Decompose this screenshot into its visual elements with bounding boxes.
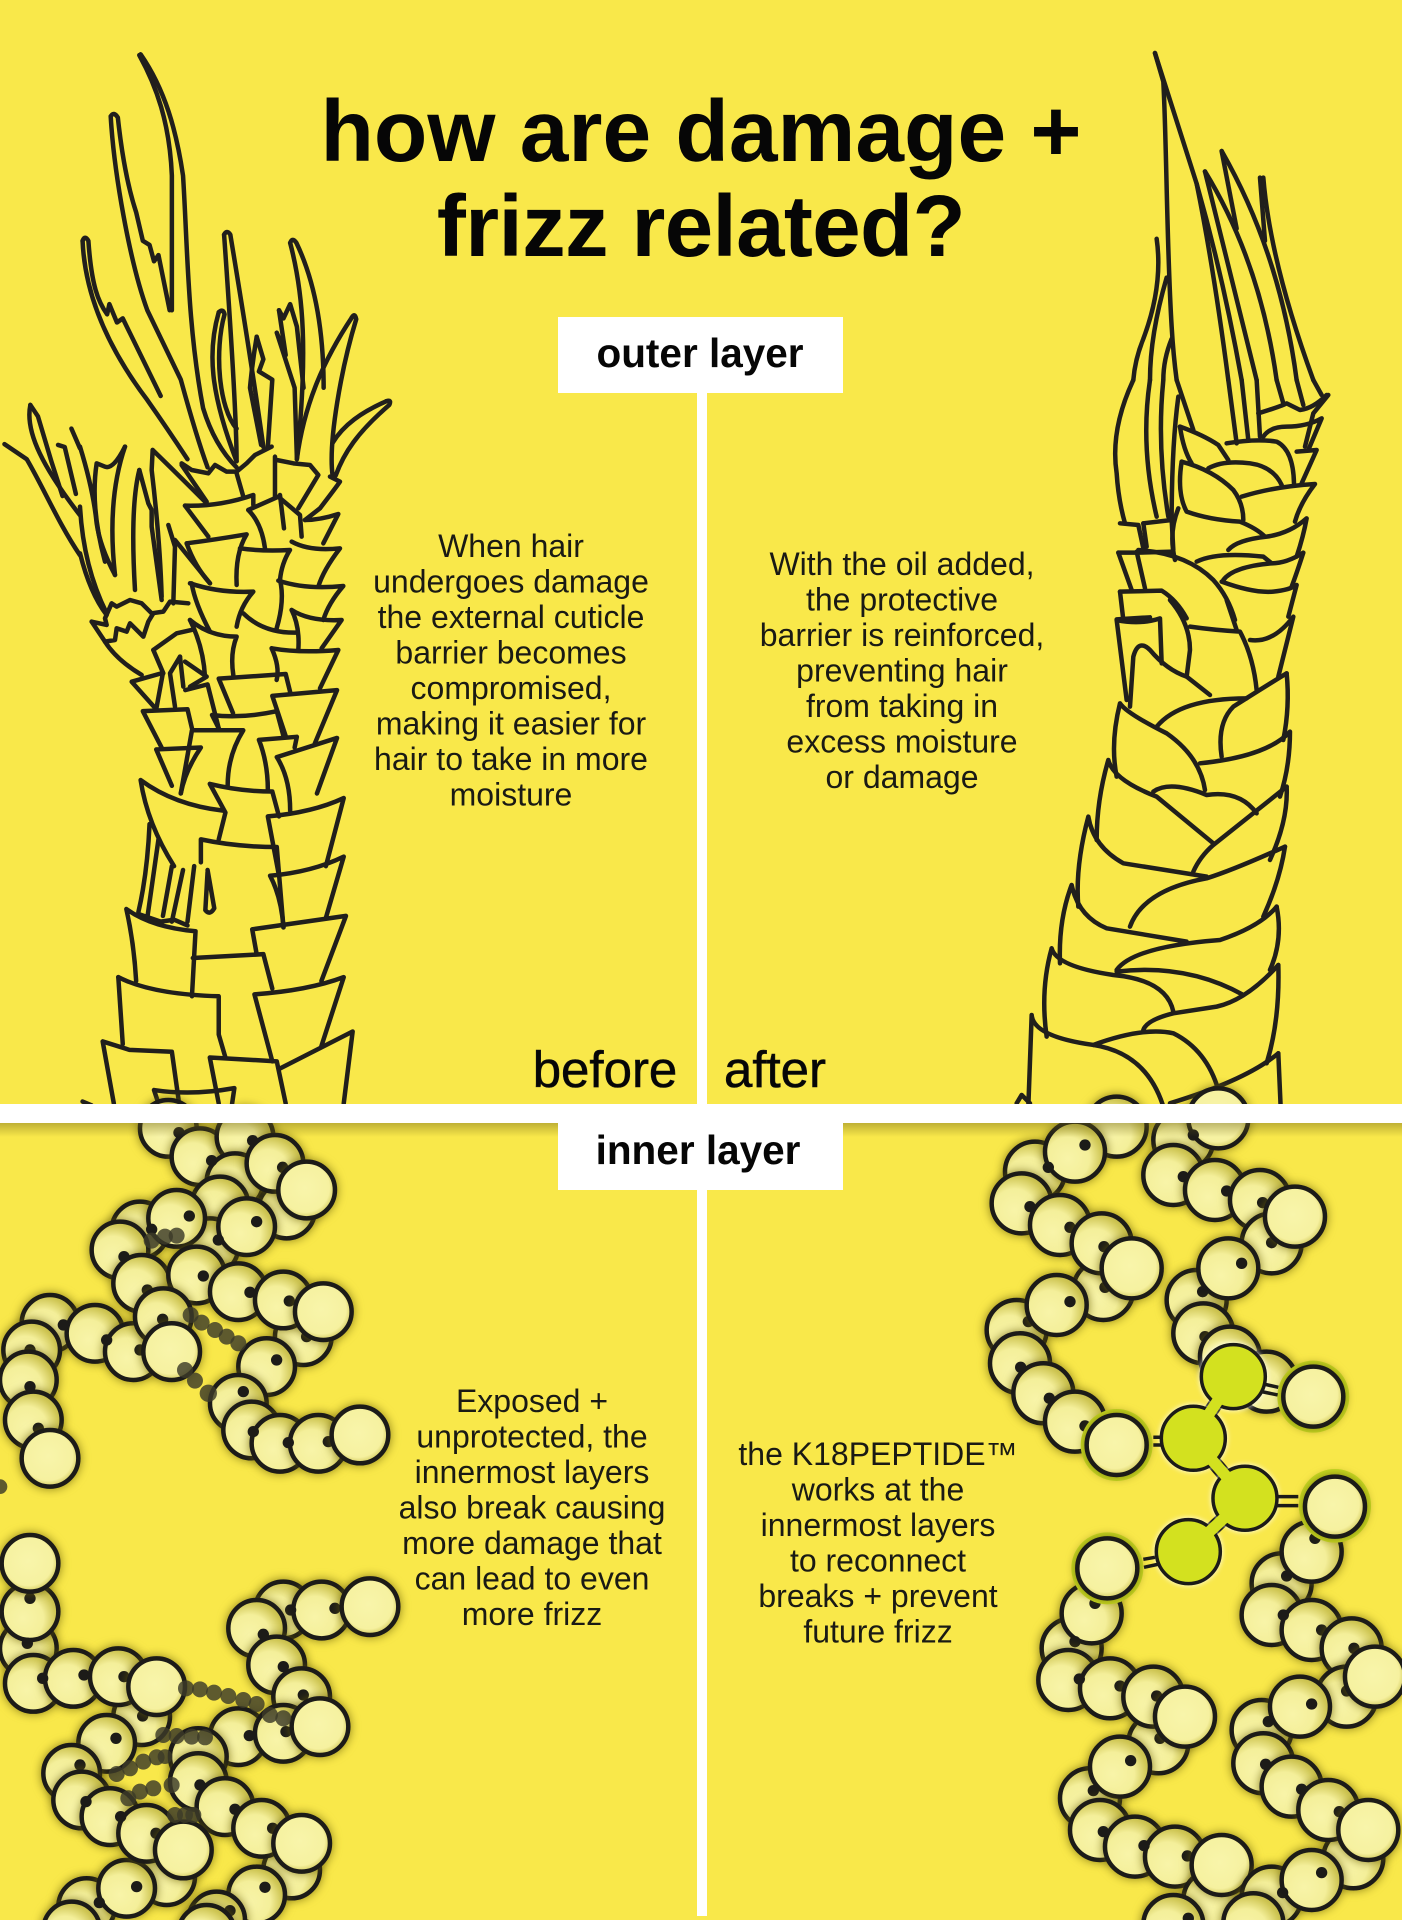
text: inner layer before: more damage that: [402, 1525, 662, 1561]
text: outer layer after: excess moisture: [786, 724, 1018, 760]
peptide halo beads: [1081, 1361, 1371, 1541]
text: inner layer before: innermost layers: [415, 1454, 649, 1490]
broken bond links: [0, 1228, 246, 1494]
label: before: before: [533, 1041, 677, 1098]
illustration: repaired inner bonds after, lower chains: [1038, 1471, 1402, 1920]
title: how are damage +: [320, 82, 1082, 180]
text: inner layer before: can lead to even: [415, 1560, 649, 1596]
text: outer layer after: or damage: [826, 759, 978, 795]
text: outer layer before: moisture: [450, 776, 572, 812]
text: inner layer before: more frizz: [462, 1596, 602, 1632]
illustration: repaired inner bonds after, upper chains: [987, 1088, 1371, 1584]
text: outer layer before: undergoes damage: [373, 564, 649, 600]
text: outer layer after: barrier is reinforced,: [760, 617, 1044, 653]
text: inner layer before: Exposed +: [456, 1383, 608, 1419]
broken bond links: [109, 1680, 291, 1823]
label: after: after: [724, 1041, 826, 1098]
text: inner layer after: breaks + prevent: [758, 1578, 998, 1614]
text: inner layer after: works at the: [791, 1472, 964, 1508]
cuticle scales lower: [83, 673, 353, 1105]
text: inner layer after: future frizz: [803, 1614, 953, 1650]
label: inner layer: inner layer: [596, 1127, 801, 1173]
title: [320, 82, 1082, 275]
vertical white divider: [697, 393, 707, 1916]
text: outer layer after: from taking in: [806, 688, 998, 724]
overlapping sealed scales: [1017, 600, 1293, 1107]
horizontal white divider: [0, 1104, 1402, 1123]
text: outer layer after: preventing hair: [796, 652, 1008, 688]
K18 peptide molecule: [1153, 1345, 1298, 1584]
illustration: damaged hair strand before: [4, 54, 390, 1105]
label: outer layer: outer layer: [596, 330, 804, 376]
frayed fibres at damaged tip: [4, 54, 390, 555]
text: inner layer after: innermost layers: [761, 1507, 995, 1543]
text: outer layer before: compromised,: [411, 670, 611, 706]
shadow under horizontal band: [0, 1123, 1402, 1137]
text: inner layer after: to reconnect: [790, 1542, 966, 1578]
smooth fibres at tip: [1133, 53, 1313, 380]
text: outer layer before: barrier becomes: [395, 634, 627, 670]
text: outer layer after: the protective: [806, 582, 998, 618]
text: inner layer before: unprotected, the: [416, 1418, 648, 1454]
text: inner layer before: also break causing: [399, 1490, 665, 1526]
label: outer layer: [558, 317, 843, 393]
text: outer layer after: With the oil added,: [769, 546, 1035, 582]
text: outer layer before: making it easier for: [376, 706, 647, 742]
text: inner layer after: the K18PEPTIDE™: [738, 1436, 1018, 1472]
illustration: sealed hair strand after: [1017, 53, 1328, 1107]
illustration: broken inner bonds before, lower chain: [0, 1535, 398, 1920]
illustration: broken inner bonds before, upper chain: [0, 1100, 388, 1494]
text: outer layer before: the external cuticle: [378, 599, 644, 635]
label: inner layer: [558, 1123, 843, 1190]
text: outer layer before: hair to take in more: [374, 741, 648, 777]
cuticle scales upper: [80, 447, 343, 707]
cuticle and upper leaf scales: [1115, 380, 1328, 620]
title: frizz related?: [437, 178, 965, 275]
text: outer layer before: When hair: [438, 528, 584, 564]
